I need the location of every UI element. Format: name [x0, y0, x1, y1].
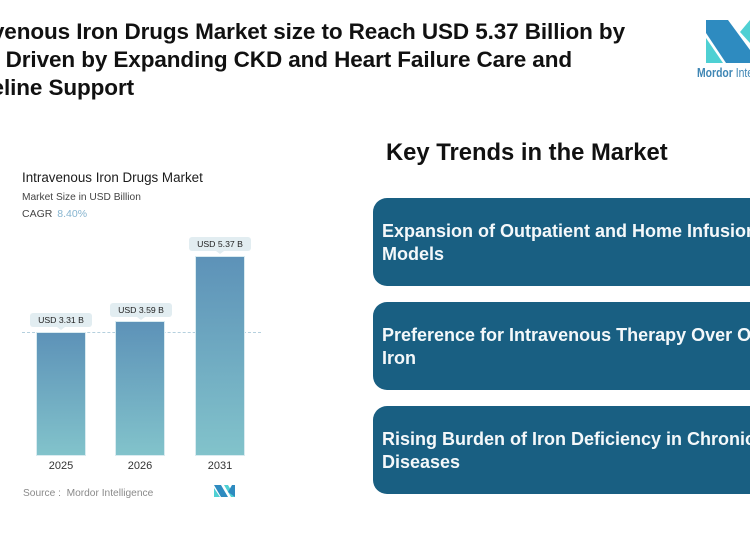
chart subtitle: Market Size in USD Billion: [22, 192, 141, 203]
value label: 2026: [110, 303, 172, 317]
heading: key trends: Key Trends in the Market: [386, 139, 668, 166]
year: 2025: 2025: [49, 460, 73, 472]
year: 2026: 2026: [128, 460, 152, 472]
chart title: Intravenous Iron Drugs Market: [22, 170, 203, 185]
chart: market size bar chart: [22, 170, 203, 220]
bar: 2025: [37, 333, 85, 455]
bar: 2026: [116, 322, 164, 455]
panel: trend 1: Expansion of Outpatient and Home Infusion: [382, 221, 750, 241]
baseline reference: [22, 332, 261, 333]
value label: 2025: [30, 313, 92, 327]
icon: small Mordor logo: [214, 485, 235, 497]
year: 2031: 2031: [208, 460, 232, 472]
panel: trend 2: Iron: [382, 348, 416, 368]
logo: Mordor Intelligence: [697, 20, 750, 80]
title: [0, 19, 625, 100]
value label: 2025: USD 3.31 B: [38, 315, 84, 325]
panel: trend 3: Rising Burden of Iron Deficiency in Chronic: [382, 429, 750, 449]
panel: trend 2: [373, 302, 750, 390]
value label: 2026: USD 3.59 B: [118, 305, 164, 315]
source: Source : Mordor Intelligence: [23, 488, 153, 499]
panel: trend 3: Diseases: [382, 452, 460, 472]
CAGR: CAGR 8.40%: [22, 208, 87, 220]
panel: trend 1: [373, 198, 750, 286]
panel: trend 1: Models: [382, 244, 444, 264]
value label: 2031: [189, 237, 251, 251]
panel: trend 3: [373, 406, 750, 494]
value label: 2031: USD 5.37 B: [197, 239, 243, 249]
bar: 2031: [196, 257, 244, 455]
